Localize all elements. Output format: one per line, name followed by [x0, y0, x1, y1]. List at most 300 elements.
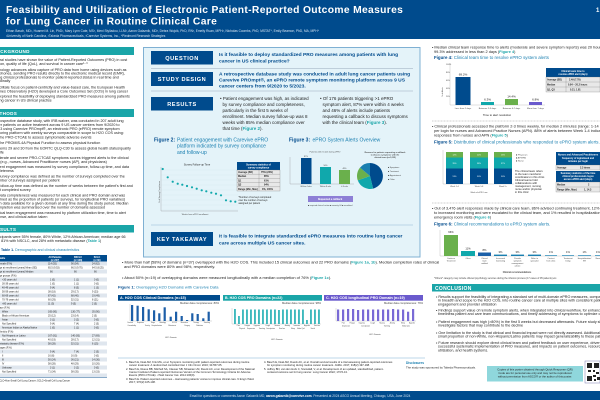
table: summary statistics figure 2: 85% [264, 175, 270, 178]
table 1: demographics: 9 (4) [50, 286, 55, 290]
box: study design: STUDY DESIGN [158, 77, 206, 83]
chart: figure 4 time to resolve: More than 7 days [527, 107, 545, 110]
chart: figure 4 time to resolve [441, 63, 545, 117]
table 1: demographics: Black or African American [2, 314, 30, 318]
header banner [0, 0, 600, 39]
table 1: demographics: 36 (21) [71, 358, 79, 362]
chart: alerts pie: to discuss symptoms with the [371, 154, 400, 157]
note: figure 2: assigned per patient [238, 202, 260, 205]
references: 4. Basch E, Deal AM, Dueck AC, et al. Overall survival results of a trial assessing patient-reported outcomes [264, 360, 393, 364]
table: figure 4 summary: Q1, Q3 [547, 88, 555, 92]
table: figure 5 summary: Range (Min, Max) [557, 188, 577, 192]
chart: A clinical domains: Histology [159, 321, 166, 324]
caption: figure 2: Figure 2: [154, 138, 175, 144]
caption: figure 6: Figure 6: Clinical recommendations to ePRO system alerts. [434, 222, 550, 226]
table: figure 5 frequency: 2.3 times [580, 166, 591, 170]
references: cancer treatment: A randomized controlled trial. J Clin Oncol. 2016; 34:557-65. [129, 363, 222, 367]
chart: figure 6 recommendations: Delay [565, 260, 571, 262]
chart: figure 4 time to resolve: 6.3% [484, 98, 491, 102]
text: H2O COS results: and PRO domains were 80% and 98%, respectively. [124, 264, 215, 269]
note: figure 2: over the number of surveys [238, 199, 268, 202]
chart: figure 6 recommendations: Refer to [531, 257, 539, 260]
box: study design [151, 72, 213, 86]
disclosures: The study was sponsored by Takeda Pharmaceuticals. [406, 366, 476, 370]
chart: figure 4 time to resolve: 40% [446, 88, 450, 90]
table 1: demographics: 6 (15) [92, 342, 98, 346]
chart: alerts pie: Reasons for patients requesting a callback [365, 151, 406, 154]
table 1: demographics: 9 (5) [71, 302, 76, 306]
chart: figure 6 recommendations [440, 230, 600, 274]
chart: alerts bars: 87% [304, 156, 308, 158]
chart: figure 6 recommendations: symptom [513, 260, 522, 262]
chart: C longitudinal PRO domains: H2O Domain [369, 334, 381, 336]
panel: conclusion [432, 284, 600, 352]
table: figure 5 frequency: minutes per login [568, 160, 588, 163]
references: 5. Jeffrey BN, van den Hurk C, Snowdall, V, et al. Development of an updated, standardized, patient- [264, 367, 384, 371]
table 1: demographics: 64.5 (8.25) [92, 266, 104, 270]
table 1: demographics: 11 (5) [48, 302, 54, 306]
chart: figure 4 time to resolve: % of Alerts [441, 87, 444, 97]
chart: figure 6 recommendations: Other [465, 257, 471, 260]
note: figure 2: *Number of surveys completed [238, 196, 272, 199]
table: summary statistics figure 2: Summary statistics of [246, 164, 271, 166]
chart: figure 6 recommendations: team [482, 260, 487, 262]
chart: figure 6 recommendations: Provide [514, 258, 522, 260]
table 1: demographics: 29 (17) [71, 290, 79, 294]
chart: B PRO domains: B. H2O COS PRO Domains (n=22) [225, 296, 283, 300]
chart: figure 4 time to resolve: 14.4% [507, 94, 516, 98]
note: figure 5: in this clinic [515, 190, 529, 194]
chart: C longitudinal PRO domains: Fatigue [350, 322, 355, 324]
chart: figure 6 recommendations: 3% [516, 250, 520, 254]
callout: QR code notice [487, 366, 583, 382]
table 1: demographics: 7 (4) [74, 322, 79, 326]
caption: figure 3: Figure 3: [289, 138, 310, 144]
chart: C longitudinal PRO domains [324, 295, 424, 336]
text: conclusion bullets: utilization, and health systems. [438, 348, 488, 352]
chart: B PRO domains: H2O Domain [271, 339, 283, 341]
note: figure 5: to the team members/ [515, 172, 541, 176]
chart: A clinical domains: Metastasis [168, 324, 176, 327]
table: figure 4 summary: Average (SD) [547, 78, 562, 82]
chart: C longitudinal PRO domains: Appetite [409, 322, 415, 324]
chart: A clinical domains: Surgery [184, 325, 190, 327]
chart: figure 4 time to resolve: 60% [446, 80, 450, 82]
chart: figure 4 time to resolve: 69.2% [459, 72, 468, 76]
legend: patient alerts: Requested a callback [318, 198, 343, 201]
text: conclusion bullets: • Findings support value of remote symptom alerts, when integrated into clinical workflow, for enhancing [436, 308, 600, 312]
table 1: demographics: 60 (29) [48, 298, 56, 302]
table 1: demographics: 1 (0) [50, 326, 55, 330]
table 1: demographics: 3 (1) [50, 318, 55, 322]
table 1: demographics: 8 (5) [74, 286, 79, 290]
table 1: demographics: 24 (62) [92, 262, 100, 266]
chart: figure 6 recommendations: Treatment [563, 257, 573, 260]
chart: C longitudinal PRO domains: Cough [370, 322, 375, 324]
table 1: demographics: 3 (2) [74, 366, 79, 370]
chart: A clinical domains: H2O Domain [165, 337, 177, 339]
table 1: demographics: 58 (35) [71, 370, 79, 374]
authors: Ethan Basch, MD¹, Huamei M. Lin, PhD², Mary Lynn Cate, MS³, Meni Styliadou, LLM², Aaron Galaznik, MD³, Debra Wujcik, PhD, RN³, Emelly Ruan, MPH², Nicholas Coombs, PhD, MSTAT⁴, Emily Beamon, PhD, MA, MPH⁴ [6, 29, 319, 33]
panel: background [0, 47, 134, 103]
table 1: demographics: 23 (14) [71, 314, 79, 318]
panel: key findings [144, 48, 420, 257]
references: for symptom monitoring during routine cancer treatment. JAMA. 2017; 318(2):197-198. [267, 363, 370, 367]
table 1: demographics: 9 (23) [92, 290, 98, 294]
chart: figure 6 recommendations: 1% [566, 250, 571, 254]
footer banner [0, 391, 600, 400]
chart: A clinical domains [118, 295, 220, 339]
text: results column 2: • Of 176 patients triggering >1 ePRO [320, 96, 394, 101]
panel: results [0, 225, 134, 252]
chart: C longitudinal PRO domains: Dyspnea [359, 322, 365, 324]
chart: B PRO domains: Social [311, 328, 316, 330]
chart: B PRO domains: Diarrhea [279, 328, 285, 330]
table 1: demographics: 0 (0) [94, 354, 99, 358]
chart: C longitudinal PRO domains: Global QoL [402, 326, 410, 328]
chart: figure 5 stacked bars: 13% [501, 154, 505, 156]
chart: C longitudinal PRO domains: C. H2O COS longitudinal PRO Domain (n=19) [326, 296, 406, 300]
chart: A clinical domains: Hospitalization [152, 324, 162, 327]
legend: patient alerts [308, 196, 353, 207]
text: conclusion bullets: in breadth and scope to the H2O COS, into routine cancer care at multiple sites with consistent patient [438, 299, 600, 303]
table 1: demographics: 1 (3) [94, 286, 99, 290]
table 1: demographics: 1 (1) [74, 326, 79, 330]
chart: B PRO domains: Median data completeness: 98% [282, 301, 322, 305]
table: figure 5 frequency: frequency of login/week and [562, 157, 595, 160]
callout: QR code notice: without permission from ASCO® or the author of this poster. [498, 374, 572, 378]
chart: figure 6 recommendations: 3% [533, 250, 537, 254]
table 1: demographics: 48 (29) [71, 362, 79, 366]
table 1: demographics: 9 (4) [50, 322, 55, 326]
table 1: demographics: 38 (18) [48, 290, 56, 294]
table 1: demographics: NSCLC [74, 256, 82, 259]
text: conclusion bullets: successful systematic implementation of PRO measures, and impacts on patient outcomes, resource [438, 345, 600, 349]
table 1: demographics: 165 (80) [48, 310, 57, 314]
chart: A clinical domains: Response [137, 322, 144, 324]
title: for Lung Cancer in Routine Clinical Care [6, 16, 217, 28]
table 1: demographics: 14 (36) [92, 358, 100, 362]
chart: C longitudinal PRO domains: Depression [342, 326, 350, 328]
table 1: demographics: 66 [94, 270, 97, 274]
table: summary statistics figure 2: 75% (23%) [261, 171, 273, 174]
table 1: demographics: 0 (0) [94, 326, 99, 330]
table 1: demographics: 40 (19) [48, 338, 56, 342]
table 1: demographics: 140 (83) [71, 334, 80, 338]
note: figure 5: The clinical team refers [515, 169, 543, 173]
table 1: demographics: White [2, 310, 9, 314]
legend: figure 5: ■ Nurse [516, 160, 525, 162]
references: Cancer Institute's Patient-reported Outcomes Version of the Common Terminology Criteria for Adverse [129, 370, 251, 374]
table 1: demographics: 35 (90) [92, 310, 100, 314]
table: figure 4 summary [546, 68, 600, 92]
table 1: demographics: 16 (9) [71, 354, 77, 358]
legend: figure 5: ■ Physician [516, 154, 528, 156]
table: figure 5 summary: 2 [588, 184, 590, 186]
table: summary statistics figure 2: Q1 [238, 179, 242, 182]
box: key takeaway: KEY TAKEAWAY [157, 237, 207, 243]
note: figure 5: collaborations with [515, 181, 538, 185]
chart: figure 6 recommendations: 1% [596, 250, 600, 254]
chart: A clinical domains: Radiation [196, 324, 203, 327]
table 1: demographics: (n=39) [93, 259, 101, 262]
table 1: demographics: Not Specified [2, 338, 17, 342]
footnote: figure 6: *Others* category may include offered psychology services during the infusion process (17 cases of 95 patients) etc. [434, 277, 557, 280]
chart: C longitudinal PRO domains: Constipation [361, 324, 370, 328]
chart: alerts bars: 48% [342, 168, 347, 170]
text: platform utilization: responses from nurses and APN (Figure 5) [434, 134, 508, 138]
table: figure 4 summary: Clinical team time to [561, 70, 585, 73]
table 1: demographics: II [2, 354, 4, 358]
references: centered outcome set for lung cancer. Lung Cancer 2022; 173:5-13. [267, 370, 348, 374]
text: results column 2: and 46% of alerts include patients [322, 108, 391, 113]
caption: figure 5: Figure 5: Distribution of clinical professionals who responded to ePRO system alerts. [434, 140, 600, 144]
chart: A clinical domains: Toxicity [145, 324, 150, 327]
table 1: demographics: 0 (0) [94, 366, 99, 370]
chart: alerts pie: ■ Appointment [388, 174, 401, 177]
icon: QR code [585, 361, 600, 383]
chart: figure 6 recommendations: ER [583, 260, 586, 262]
text: key takeaway: It is feasible to integrate standardized ePRO measures into routine lung cancer [219, 234, 403, 240]
table 1: demographics: 13 (33) [92, 370, 100, 374]
table 1: demographics: 0 (0) [94, 278, 99, 282]
table 1: demographics: 70-79 years old [2, 298, 19, 302]
chart: alerts bars: Within 4 wks [300, 185, 312, 188]
table 1: demographics: 9 (4) [50, 350, 55, 354]
table 1: demographics: 8 (21) [92, 298, 98, 302]
table: figure 5 summary: access ePRO alert (days) [564, 178, 592, 181]
chart: figure 4 time to resolve: 80% [446, 72, 450, 74]
table: figure 5 summary: Median [557, 184, 566, 186]
chart: figure 6 recommendations: notified [481, 262, 488, 265]
chart: figure 5 stacked bars: 35% [452, 163, 457, 165]
chart: figure 5 stacked bars: 12% [477, 154, 481, 156]
footer banner: Email for questions or comments Aaron Galaznik MD, aaron.galaznik@carevive.com. Presented at 2024 ASCO Annual Meeting, Chicago, USA, June 2024 [190, 394, 411, 398]
table 1: demographics: I [2, 350, 3, 354]
chart: B PRO domains: Pain [237, 325, 240, 327]
chart: A clinical domains: Comorbidity [127, 324, 136, 327]
table: summary statistics figure 2: Median [238, 175, 247, 178]
box: key takeaway [151, 232, 213, 246]
table: summary statistics figure 2: 61% [264, 179, 270, 182]
table 1: demographics: 66 [74, 270, 77, 274]
text: H2O COS results: • About 50% (n=19) of overlapping domains were measured longitudinally with a median completion of 76% (Figure 1c). [122, 275, 331, 280]
note: figure 5: Clinical teams hold [515, 178, 538, 182]
chart: figure 5 stacked bars: Week 1-4 [450, 186, 460, 188]
chart: figure 6 recommendations: Clinical recommendations [503, 271, 532, 274]
chart: figure 6 recommendations: Hospitalization/ [578, 257, 592, 260]
text: alert responses: emergency room visits (Figure 6) [434, 216, 491, 220]
chart: alerts bars: 56% [323, 165, 328, 167]
table 1: demographics: 1 (1) [74, 282, 79, 286]
table: figure 4 summary: 2.49 (7.79) [569, 78, 581, 82]
box: question: QUESTION [165, 56, 199, 62]
chart: figure 5 stacked bars: 12% [452, 154, 457, 156]
chart: figure 6 recommendations: Increased [496, 258, 505, 260]
chart: figure 4 time to resolve: 6.8% [532, 98, 539, 102]
panel: methods [0, 109, 134, 219]
chart: A clinical domains: Median data completeness: 80% [180, 301, 220, 305]
caption: figure 3: ePRO System Alerts Overview [312, 138, 381, 144]
table 1: demographics: 27 (69) [92, 334, 100, 338]
chart: figure 4 time to resolve: 100% [446, 64, 451, 66]
table 1: demographics: Asian [2, 318, 9, 322]
chart: figure 4 time to resolve: Between 2-3 days [479, 107, 497, 110]
table 1: demographics: 1 (0) [50, 282, 55, 286]
table 1: demographics: 114 (55) [48, 262, 57, 266]
table: figure 5 summary [556, 171, 600, 192]
chart: alerts bars: Within 8 wks [320, 185, 331, 188]
chart: B PRO domains: Appetite [304, 324, 310, 327]
chart: A clinical domains: Biomarker [181, 322, 188, 324]
table: figure 5 frequency: Nurses and Advanced Practitioners [558, 154, 599, 156]
caption: figure 2: Patient engagement with Carevive ePRO [177, 138, 268, 144]
table: summary statistics figure 2: survey compliance [248, 166, 270, 170]
table 1: demographics: III [2, 358, 4, 362]
table: summary statistics figure 2: Average (SD) [238, 171, 253, 174]
text: conclusion bullets: engagement and provider utilization [438, 302, 496, 306]
table caption: Table 1. Demographic and clinical characteristics [1, 248, 79, 252]
table 1: demographics: 68 (40) [71, 294, 79, 298]
table 1: demographics: All Patients [48, 256, 62, 259]
chart: figure 5 stacked bars: Week 5-8 [475, 186, 484, 188]
chart: B PRO domains: Sleep [291, 328, 295, 330]
table 1: demographics: 90 (54) [71, 262, 79, 266]
table 1: demographics: 40-49 years old [2, 286, 19, 290]
disclosures [406, 361, 476, 370]
table 1: demographics: 58 (28) [48, 342, 56, 346]
chart: alerts bars: Patients with ≥1 alert during ePRO [310, 150, 341, 154]
table 1: demographics: Not Specified [2, 322, 17, 326]
table 1: demographics: American Indian or Alaska Native [2, 326, 38, 330]
table: figure 5 frequency: Average [557, 166, 567, 170]
text: clinical team response: 99.3% addressed in less than 2 days (Figure 4) [434, 50, 515, 54]
callout: QR code notice: Copies of this poster obtained through Quick Response (QR) [497, 368, 573, 372]
table 1: demographics: 50 (24) [48, 358, 56, 362]
text: question: Is it feasible to deploy standardized PRO measures among patients with lung [219, 52, 398, 58]
text: conclusion bullets: investigate factors that may contribute to the decline [438, 324, 523, 328]
chart: figure 5 stacked bars: 50% [501, 176, 505, 178]
chart: figure 6 recommendations: 1% [583, 250, 587, 254]
table 1: demographics: 2 (5) [92, 302, 97, 306]
chart: figure 6 recommendations: 8% [483, 248, 487, 252]
chart: figure 6 recommendations: monitoring [496, 260, 505, 262]
chart: B PRO domains: Physical [239, 328, 246, 330]
references: 3. Basch E. Patient-reported outcomes – Harnessing patients' voices to improve clinical care. N Engl J Med. [126, 377, 254, 381]
table 1: demographics: <30 years old [2, 278, 17, 282]
table 1: demographics: 0 (0) [94, 282, 99, 286]
text: H2O COS results: • More than half (58%) of domains (n=37) overlapped with the H2O COS. This included 15 clinical outcomes and 22 PRO domains (Figure 1a, 1b). Median completion rates of clinical [122, 260, 439, 264]
chart: figure 6 recommendations: Continue [447, 257, 456, 260]
chart: figure 5 stacked bars: 50% [477, 176, 481, 178]
table 1: demographics: Unknown [2, 366, 13, 370]
chart: A clinical domains: A. H2O COS Clinical Domains (n=15) [120, 296, 187, 300]
chart: A clinical domains: Survival [127, 322, 134, 324]
table: summary statistics figure 2: Range (Min, Max) [238, 188, 258, 191]
chart: alerts pie: ■ Other [388, 178, 395, 181]
table: summary statistics figure 2: 94% [264, 184, 270, 187]
chart: alerts bars [290, 150, 354, 188]
table: figure 5 frequency [556, 152, 600, 170]
chart: B PRO domains: Anxiety [285, 324, 290, 327]
table: figure 5 summary: Summary statistics of the time [561, 172, 596, 175]
references [126, 360, 393, 384]
chart: figure 4 time to resolve: Less than 2 days [455, 107, 472, 110]
text: results column 1: enrollment. Median survey follow-up was 8 [222, 114, 308, 119]
chart: figure 5 stacked bars: 37% [501, 163, 505, 165]
table 1: demographics: (n=207) [51, 259, 59, 262]
table 1: demographics: 66.5 (9.70) [71, 266, 83, 270]
chart: figure 4 time to resolve: Time to alert resolution [483, 113, 512, 117]
text: results column 1: by survey compliance and completeness, [222, 102, 305, 107]
table 1: demographics: 87 (42) [48, 294, 56, 298]
text: study design: A retrospective database study was conducted in adult lung cancer patients using [219, 72, 410, 78]
table 1: demographics: 50-59 years old [2, 290, 19, 294]
text: results column 2: requesting a callback to discuss symptoms [322, 114, 409, 119]
table 1: demographics: 2 (5) [92, 314, 97, 318]
chart: survey follow-up scatter: Weeks from ePRO enrollment [182, 213, 209, 216]
chart: figure 5 stacked bars [443, 150, 514, 194]
table 1: demographics: 58 (28) [48, 362, 56, 366]
table 1: demographics: Not Specified [2, 370, 17, 374]
chart: B PRO domains [223, 295, 322, 341]
text: results column 1: • Patient engagement was high, as indicated [220, 96, 309, 101]
chart: B PRO domains: Nausea [274, 325, 280, 327]
callout: QR code notice: Code are for personal use only and may not be reproduced [498, 371, 572, 375]
table 1: demographics: 167 (81) [48, 334, 57, 338]
chart: figure 4 time to resolve: 20% [446, 96, 450, 98]
caption: figure 4: Figure 4: Clinical team time to resolve ePRO system alerts [434, 55, 550, 60]
chart: C longitudinal PRO domains: Median data completeness: 76% [384, 301, 424, 305]
caption: figure 2: and follow-up [177, 150, 207, 156]
references: 2. Basch E, Reeve BB, Mitchell SA, Clauser SB, Minasian LM, Dueck AC, et al. Development of the National [126, 367, 255, 371]
chart: survey follow-up scatter [159, 162, 238, 216]
chart: alerts bars: ≥ 8 wks [341, 185, 348, 188]
table: figure 4 summary: resolve ePRO alert (days) [559, 73, 588, 76]
table 1: demographics: 10 (26) [92, 362, 100, 366]
chart: A clinical domains: Smoking [204, 322, 210, 324]
legend: figure 5: ■ APN/PA [516, 156, 526, 160]
chart: figure 6 recommendations: Clinical [481, 258, 488, 260]
heading: conclusion: CONCLUSION [435, 286, 472, 292]
chart: B PRO domains: Constipation [266, 327, 275, 330]
chart: figure 6 recommendations: management [512, 262, 524, 265]
chart: survey follow-up scatter: % of Survey Compliance [159, 180, 161, 203]
poster number: 1 [596, 8, 600, 14]
table 1: demographics: SCLC [94, 256, 101, 259]
table 1: demographics: IV [2, 362, 5, 366]
caption: figure 1: Figure 1: Overlapping H2O Domains with Carevive Data [118, 284, 219, 290]
table 1: demographics: 28 (17) [71, 338, 79, 342]
chart: figure 6 recommendations: advice [515, 266, 521, 268]
references: 2017; 376(2):105-108. [129, 380, 156, 384]
legend: patient alerts: ■ required clinical action ■ severity ≥3 ■ escalated [308, 204, 352, 207]
box: question [151, 51, 213, 64]
chart: figure 4 time to resolve: Between 4-7 days [503, 107, 521, 110]
chart: figure 6 recommendations: 11% [465, 246, 471, 250]
table 1: demographics: 60-69 years old [2, 294, 19, 298]
box: results [151, 97, 213, 110]
table 1: demographics: 52 (31) [71, 298, 79, 302]
note: figure 5: nurse and/or physician [515, 187, 543, 191]
table 1: demographics: 65.5 (9.53) [48, 266, 60, 270]
text: results column 1: weeks with 85% median compliance over [222, 120, 305, 125]
table 1: demographics: >80 years old [2, 302, 17, 306]
chart: figure 6 recommendations: specialist [530, 260, 539, 262]
chart: alerts pie: clinical team (n=1,055) [374, 156, 396, 159]
chart: figure 6 recommendations: Contact [548, 257, 555, 260]
table 1: demographics: 0 (0) [94, 318, 99, 322]
